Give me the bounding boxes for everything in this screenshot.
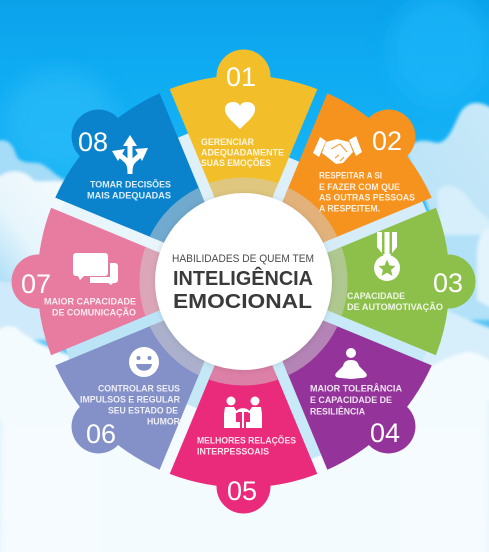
text 05: INTERPESSOAIS [197, 446, 269, 456]
number 01: 01 [226, 62, 256, 92]
center circle shadow [154, 193, 332, 371]
text 04: MAIOR TOLERÂNCIA [310, 382, 403, 394]
number 02: 02 [372, 126, 402, 156]
text 03: CAPACIDADE [347, 291, 405, 301]
number 03: 03 [433, 268, 463, 298]
title: INTELIGÊNCIA [173, 266, 313, 290]
subtitle: HABILIDADES DE QUEM TEM [172, 253, 314, 265]
number 08: 08 [78, 127, 108, 157]
center circle with title: EMOCIONAL [173, 290, 312, 313]
text 06: SEU ESTADO DE [108, 406, 178, 416]
center circle with title [155, 193, 332, 370]
text 06: HUMOR [147, 416, 181, 426]
text 03: DE AUTOMOTIVAÇÃO [347, 302, 443, 312]
text 06: CONTROLAR SEUS [98, 384, 180, 394]
text 01: GERENCIAR [201, 137, 255, 147]
text 02: AS OUTRAS PESSOAS [319, 192, 415, 202]
icon: chat bubbles [73, 253, 118, 285]
panel 06 [27, 286, 239, 498]
icon: diverging arrows [112, 135, 148, 174]
icon: heart [225, 102, 255, 129]
text 04: E CAPACIDADE DE [310, 395, 392, 405]
text 02 [319, 170, 415, 214]
icon: meditating person [335, 348, 367, 379]
panel 04 [248, 286, 460, 498]
number 05: 05 [227, 476, 257, 506]
item 08 [78, 127, 171, 200]
icon: medal [374, 232, 400, 281]
text 07 [44, 296, 136, 318]
text 06: IMPULSOS E REGULAR [80, 394, 181, 404]
panel 03 [324, 208, 476, 355]
item 03 [347, 232, 463, 312]
gaps between segments [60, 133, 427, 459]
item 05 [197, 396, 296, 506]
panel 02 [248, 65, 460, 277]
panel 07 [12, 208, 163, 355]
number 06: 06 [86, 419, 116, 449]
icon: smiley [129, 347, 159, 377]
text 07: DE COMUNICAÇÃO [52, 308, 136, 318]
text 02: E FAZER COM QUE [319, 182, 400, 192]
text 08: MAIS ADEQUADAS [87, 190, 171, 200]
text 05: MELHORES RELAÇÕES [197, 436, 296, 446]
panel 01 [170, 50, 317, 201]
wheel segments [12, 50, 476, 514]
text 04: RESILIÊNCIA [310, 406, 366, 416]
item 04 [310, 348, 403, 448]
text 01 [201, 137, 284, 168]
item 02 [313, 126, 415, 214]
text 07: MAIOR CAPACIDADE [44, 296, 136, 306]
text 03 [347, 291, 443, 312]
icon: handshake [313, 136, 362, 164]
text 08: TOMAR DECISÕES [90, 180, 171, 190]
panel 08 [27, 65, 239, 277]
number 04: 04 [370, 418, 400, 448]
item 07 [21, 253, 136, 318]
text 08 [87, 180, 171, 200]
text 02: A RESPEITEM. [319, 204, 380, 214]
icon: two people at table [224, 396, 262, 428]
text 06 [80, 384, 181, 426]
number 07: 07 [21, 269, 51, 299]
item 01 [201, 62, 284, 168]
panel 05 [170, 362, 317, 514]
text 02: RESPEITAR A SI [319, 170, 382, 180]
text 01: ADEQUADAMENTE [201, 148, 284, 158]
item 06 [80, 347, 181, 449]
text 05 [197, 436, 296, 456]
text 01: SUAS EMOÇÕES [201, 158, 271, 168]
text 04 [310, 382, 403, 416]
